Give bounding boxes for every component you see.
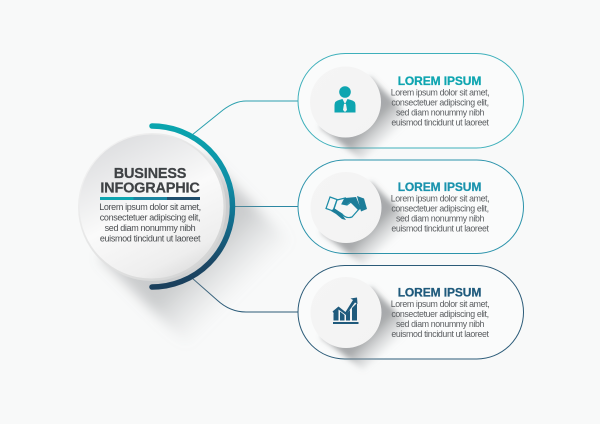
body text 1: sed diam nonummy nibh — [396, 108, 485, 118]
pill outline 3 — [298, 266, 524, 359]
shadow 1 — [320, 77, 412, 160]
pill outline 1 — [298, 54, 524, 148]
heading 2: LOREM IPSUM — [398, 180, 481, 194]
connector: top — [192, 101, 298, 135]
body text 3: euismod tincidunt ut laoreet — [391, 329, 490, 339]
description: consectetuer adipiscing elit, — [100, 212, 200, 222]
body text 1: Lorem ipsum dolor sit amet, — [391, 88, 489, 98]
body text 2: consectetuer adipiscing elit, — [391, 204, 489, 214]
body text 3: Lorem ipsum dolor sit amet, — [391, 299, 489, 309]
body text 2: sed diam nonummy nibh — [396, 214, 485, 224]
pill outline 2 — [298, 160, 524, 254]
icon: growth chart — [332, 298, 358, 324]
description: Lorem ipsum dolor sit amet, — [99, 202, 201, 212]
arc — [152, 126, 232, 287]
connector: middle — [233, 206, 298, 208]
shadow 2 — [321, 182, 413, 265]
disc rim — [78, 133, 226, 281]
connector: bottom — [192, 278, 298, 312]
body text 3: consectetuer adipiscing elit, — [391, 309, 489, 319]
heading 3: LOREM IPSUM — [398, 286, 481, 300]
shadow 3 — [321, 287, 413, 370]
description: sed diam nonummy nibh — [105, 223, 196, 233]
description: euismod tincidunt ut laoreet — [100, 234, 201, 244]
icon disc 3 — [310, 277, 382, 348]
body text 1: consectetuer adipiscing elit, — [391, 98, 489, 108]
panel: item 2 — [298, 160, 524, 265]
body text 2: euismod tincidunt ut laoreet — [391, 224, 490, 234]
body text 3: sed diam nonummy nibh — [396, 319, 485, 329]
body text 2: Lorem ipsum dolor sit amet, — [391, 194, 489, 204]
long shadow — [100, 155, 300, 354]
title rule — [100, 197, 200, 200]
panel: item 3 — [298, 266, 524, 370]
title: INFOGRAPHIC — [100, 180, 200, 196]
title: BUSINESS — [114, 166, 187, 182]
panel: main circle — [78, 126, 300, 354]
icon: person — [334, 86, 356, 112]
icon disc 2 — [310, 172, 382, 243]
heading 1: LOREM IPSUM — [398, 74, 481, 88]
icon: handshake — [326, 196, 367, 220]
body text 1: euismod tincidunt ut laoreet — [391, 118, 490, 128]
icon disc 1 — [310, 66, 381, 138]
panel: item 1 — [298, 54, 524, 160]
disc face — [80, 134, 224, 278]
